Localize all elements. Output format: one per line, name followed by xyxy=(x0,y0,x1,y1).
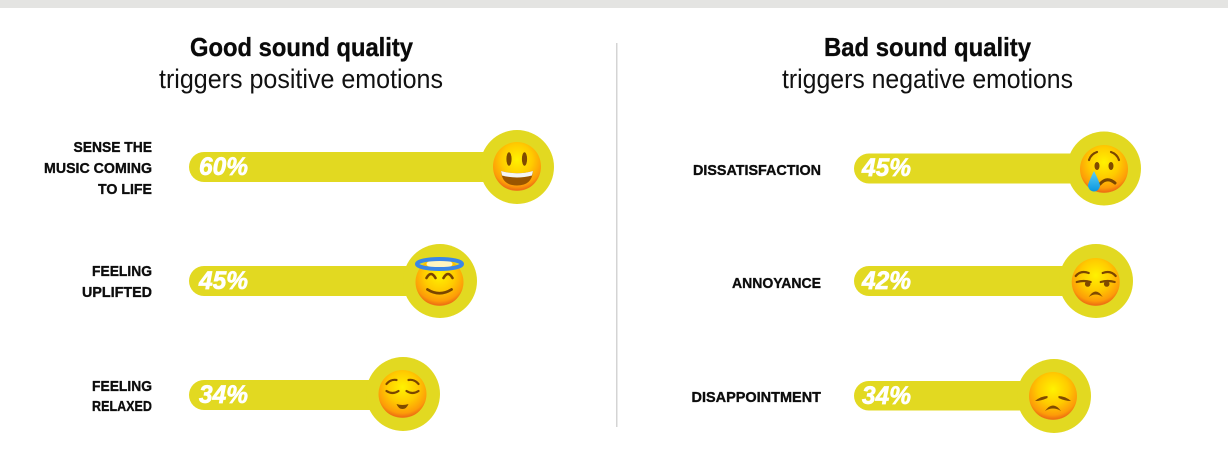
row: disappointment 34%: 34% xyxy=(862,382,911,410)
row: feeling relaxed 34% xyxy=(92,357,440,431)
row: sense the music coming to life 60% xyxy=(44,130,554,204)
row: feeling relaxed 34%: 34% xyxy=(199,381,248,409)
icon: relieved face xyxy=(378,370,426,418)
row: annoyance 42%: 42% xyxy=(861,267,911,295)
row: feeling relaxed 34%: RELAXED xyxy=(92,398,152,415)
row: dissatisfaction 45% xyxy=(693,132,1141,206)
heading: bad sound quality xyxy=(782,32,1073,94)
icon: disappointed face xyxy=(1029,372,1077,420)
row: dissatisfaction 45%: 45% xyxy=(861,154,911,182)
icon: grinning face xyxy=(493,142,541,191)
heading: good sound quality xyxy=(159,32,443,94)
row: feeling uplifted 45%: FEELING xyxy=(92,263,152,280)
row: sense the music coming to life 60%: MUSIC COMING xyxy=(44,160,152,177)
row: feeling uplifted 45%: 45% xyxy=(198,267,248,295)
heading: bad sound quality: triggers negative emotions xyxy=(782,64,1073,94)
row: dissatisfaction 45%: DISSATISFACTION xyxy=(693,162,821,179)
heading: bad sound quality: Bad sound quality xyxy=(824,32,1031,62)
row: annoyance 42% xyxy=(732,244,1133,318)
icon: crying face xyxy=(1080,145,1128,193)
top grey strip xyxy=(0,0,1228,8)
panel divider xyxy=(616,43,618,427)
row: feeling uplifted 45% xyxy=(82,244,477,318)
panel: good sound quality xyxy=(44,32,554,431)
icon: smiling face with halo xyxy=(416,258,464,306)
row: sense the music coming to life 60%: SENSE THE xyxy=(74,139,152,156)
row: feeling uplifted 45%: UPLIFTED xyxy=(82,284,152,301)
row: disappointment 34%: DISAPPOINTMENT xyxy=(692,389,821,406)
icon: unamused face xyxy=(1072,258,1120,306)
heading: good sound quality: Good sound quality xyxy=(190,32,413,62)
row: sense the music coming to life 60%: 60% xyxy=(199,153,248,181)
row: feeling relaxed 34%: FEELING xyxy=(92,378,152,395)
row: sense the music coming to life 60%: TO LIFE xyxy=(98,181,152,198)
row: annoyance 42%: ANNOYANCE xyxy=(732,275,821,292)
heading: good sound quality: triggers positive emotions xyxy=(159,64,443,94)
panel: bad sound quality xyxy=(692,32,1141,433)
row: disappointment 34% xyxy=(692,359,1091,433)
